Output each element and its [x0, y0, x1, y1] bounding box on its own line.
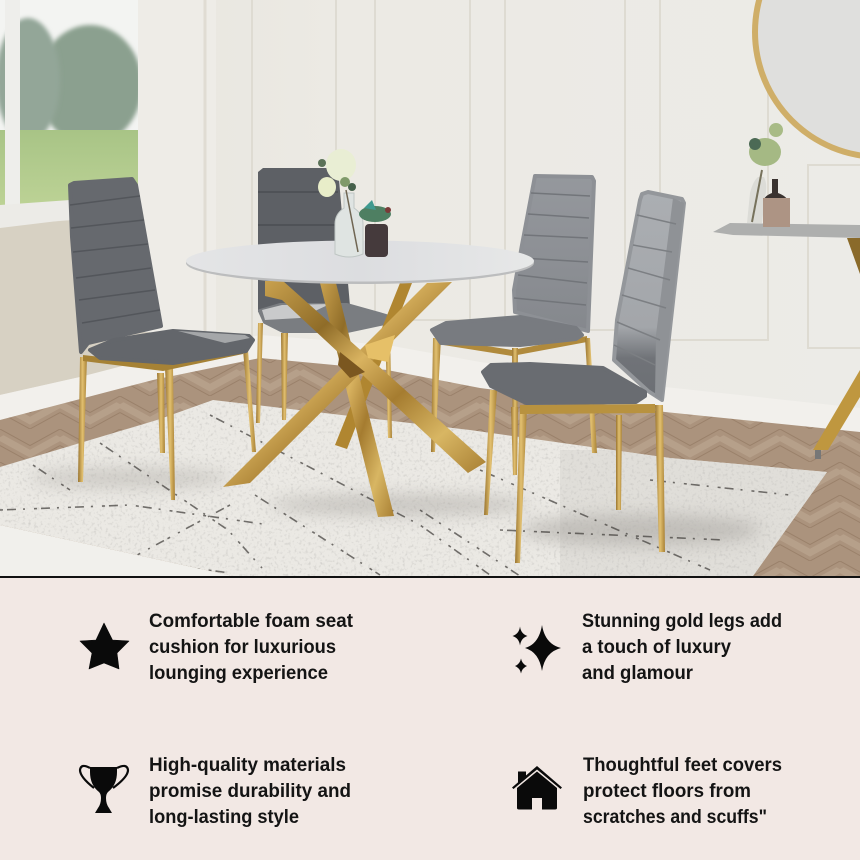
rug [0, 395, 840, 576]
text: foam seat cushion: Comfortable foam seat [149, 611, 354, 632]
text: high-quality materials: promise durability and [149, 781, 351, 802]
photo scene: dining room [0, 0, 860, 576]
chair: front left [70, 179, 256, 500]
icon: star [80, 623, 129, 669]
feature: high-quality materials [80, 755, 351, 828]
feature: foam seat cushion [80, 611, 354, 684]
text: gold legs: a touch of luxury [582, 637, 731, 658]
icon: trophy [80, 766, 128, 813]
text: feet covers: protect floors from [583, 781, 751, 802]
feature: gold legs [512, 611, 782, 684]
chair: front right [483, 192, 684, 563]
wall panel mouldings [252, 0, 860, 348]
text: feet covers [583, 755, 782, 828]
text: high-quality materials: High-quality materials [149, 755, 346, 776]
wooden floor [0, 358, 860, 576]
skirting board [0, 336, 338, 420]
text: high-quality materials: long-lasting style [149, 807, 299, 828]
icon: house [512, 766, 562, 810]
console table [713, 223, 860, 459]
text: feet covers: scratches and scuffs" [583, 807, 767, 828]
back wall [62, 0, 228, 332]
icon: sparkles [512, 625, 561, 674]
panel: features [0, 578, 860, 860]
text: gold legs [582, 611, 782, 684]
vase with flowers [318, 149, 363, 257]
console decor: plant and vase [747, 123, 790, 227]
chair: back right [431, 176, 597, 473]
text: foam seat cushion [149, 611, 354, 684]
window [0, 0, 150, 228]
text: high-quality materials [149, 755, 351, 828]
mirror [752, 0, 860, 160]
text: foam seat cushion: lounging experience [149, 663, 328, 684]
jar with succulent [359, 200, 391, 257]
left wall [0, 215, 150, 395]
text: gold legs: Stunning gold legs add [582, 611, 782, 632]
text: gold legs: and glamour [582, 663, 694, 684]
table: legs [223, 281, 486, 517]
divider line [0, 576, 860, 578]
curtain [138, 0, 206, 332]
feature: feet covers [512, 755, 782, 828]
table: round marble top [186, 240, 534, 284]
chair: back centre [256, 168, 392, 438]
text: feet covers: Thoughtful feet covers [583, 755, 782, 776]
text: foam seat cushion: cushion for luxurious [149, 637, 336, 658]
